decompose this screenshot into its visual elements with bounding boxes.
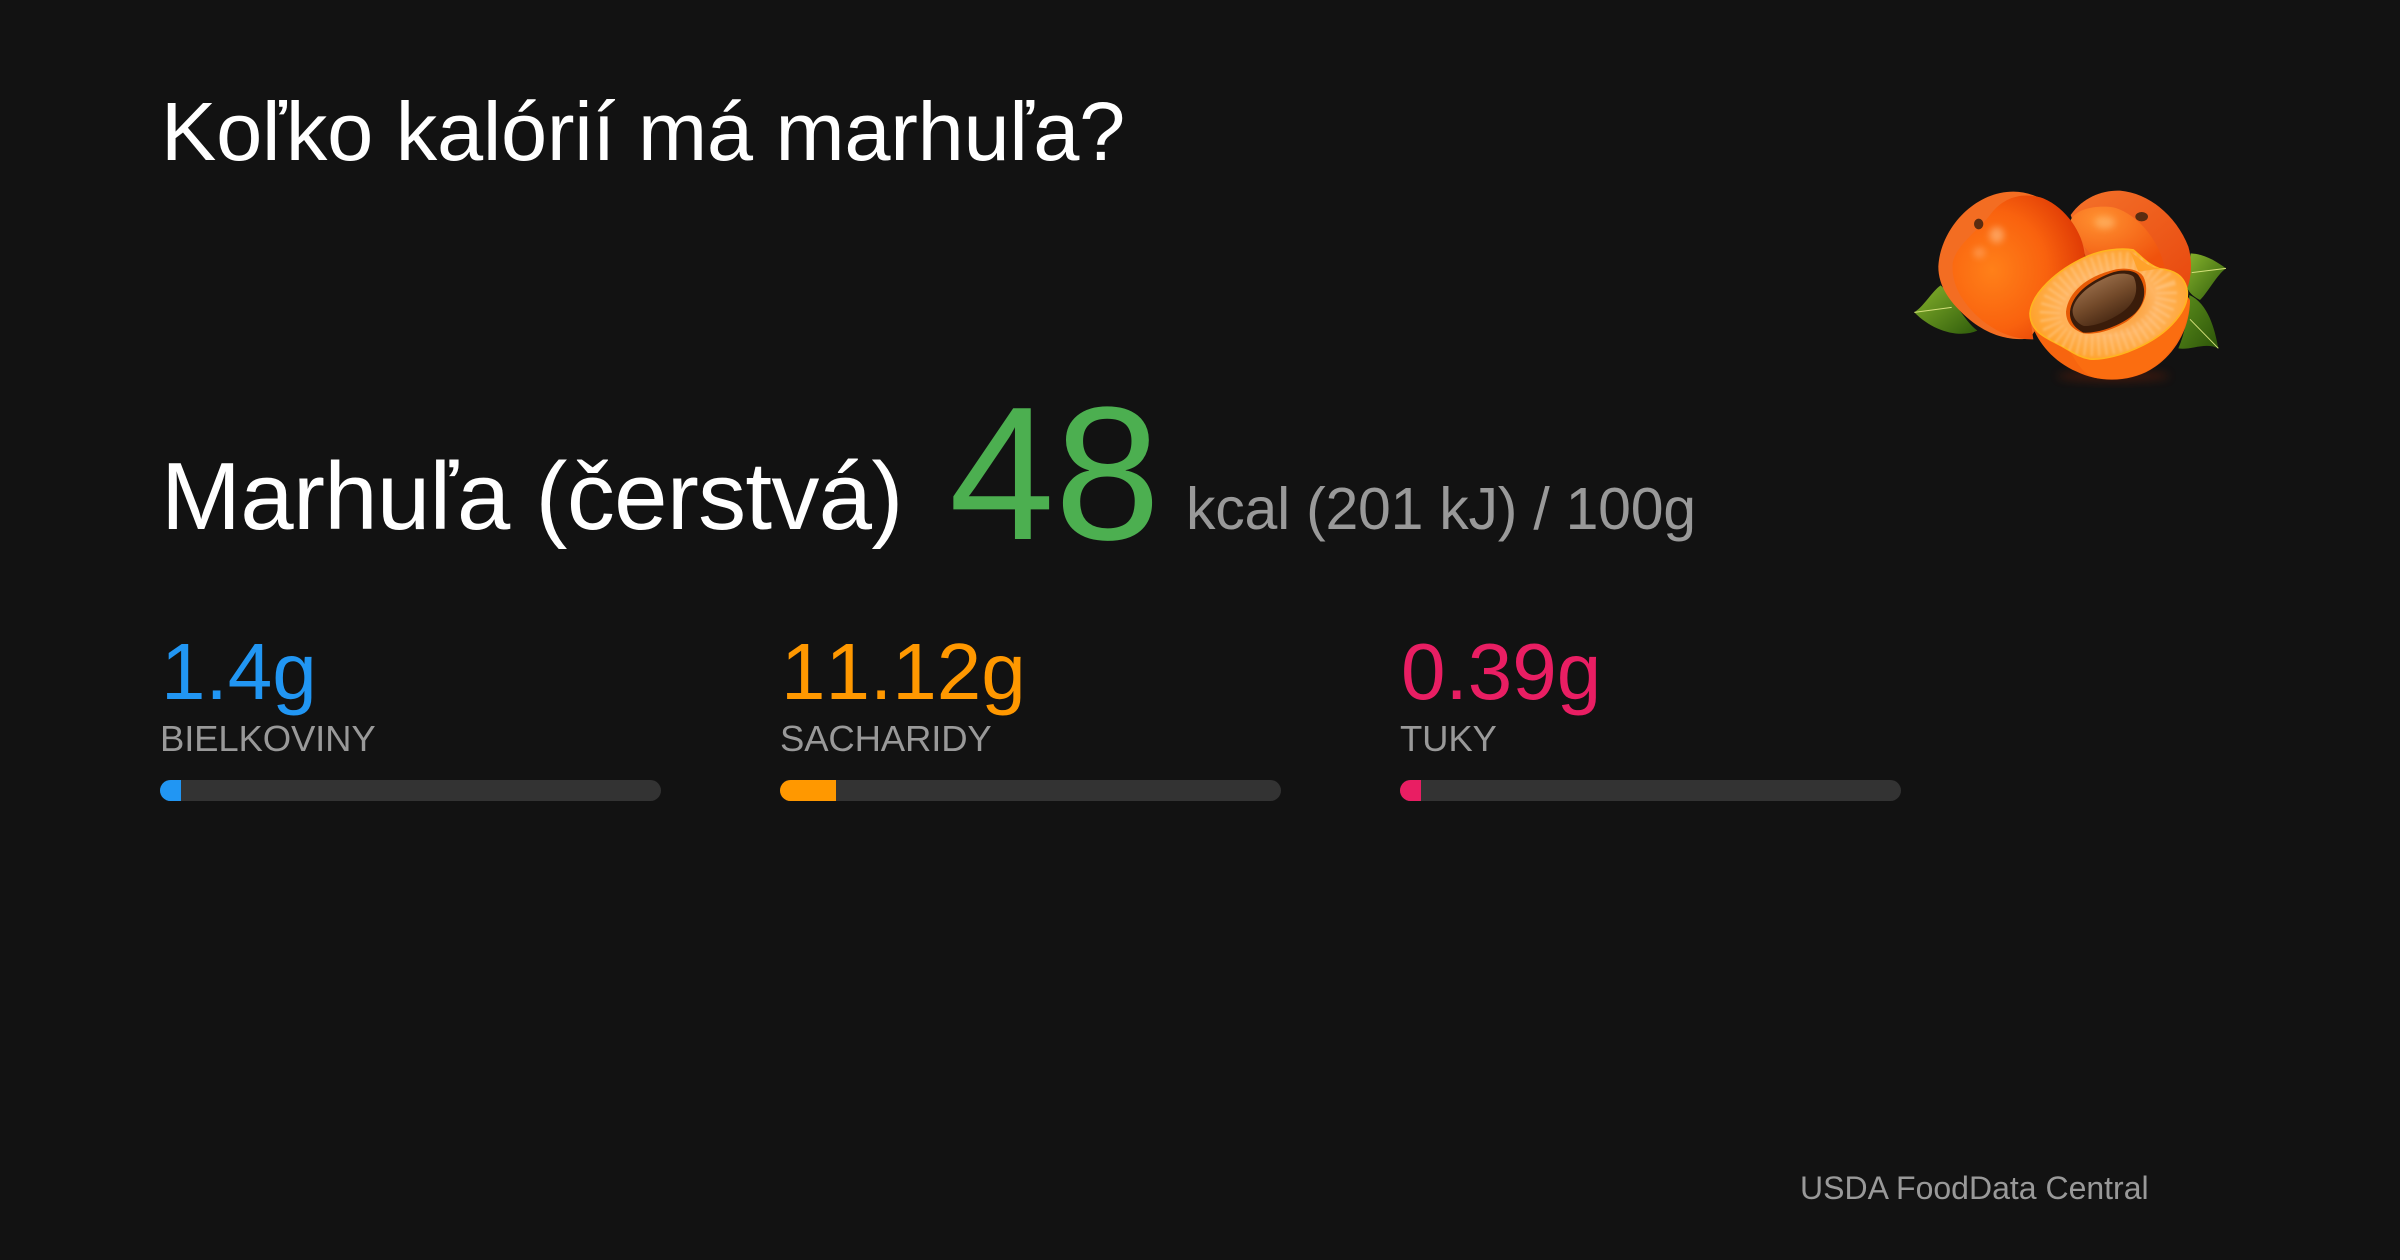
icon part: cut apricot half <box>2030 248 2190 381</box>
macro: carbohydrates <box>780 627 1281 801</box>
icon part: leaves <box>1914 253 2226 349</box>
protein bar <box>160 780 661 801</box>
macro: proteins <box>160 627 661 801</box>
carbohydrate value: 11.12g <box>781 627 1026 716</box>
source: USDA FoodData Central <box>1800 1170 2149 1206</box>
fat label: TUKY <box>1400 718 1497 759</box>
fat value: 0.39g <box>1401 627 1601 716</box>
icon part: back apricot <box>2071 191 2191 293</box>
fat bar <box>1400 780 1901 801</box>
calorie value: 48 <box>949 368 1160 580</box>
icon part: front apricot <box>1938 192 2086 339</box>
calorie unit: kcal (201 kJ) / 100g <box>1186 476 1696 542</box>
protein label: BIELKOVINY <box>160 718 376 759</box>
food name: Marhuľa (čerstvá) <box>161 443 903 550</box>
protein value: 1.4g <box>161 627 317 716</box>
carbohydrate bar <box>780 780 1281 801</box>
macro: fats <box>1400 627 1901 801</box>
icon: apricots <box>1914 190 2226 386</box>
title: Koľko kalórií má marhuľa? <box>161 85 1125 178</box>
carbohydrate label: SACHARIDY <box>780 718 992 759</box>
